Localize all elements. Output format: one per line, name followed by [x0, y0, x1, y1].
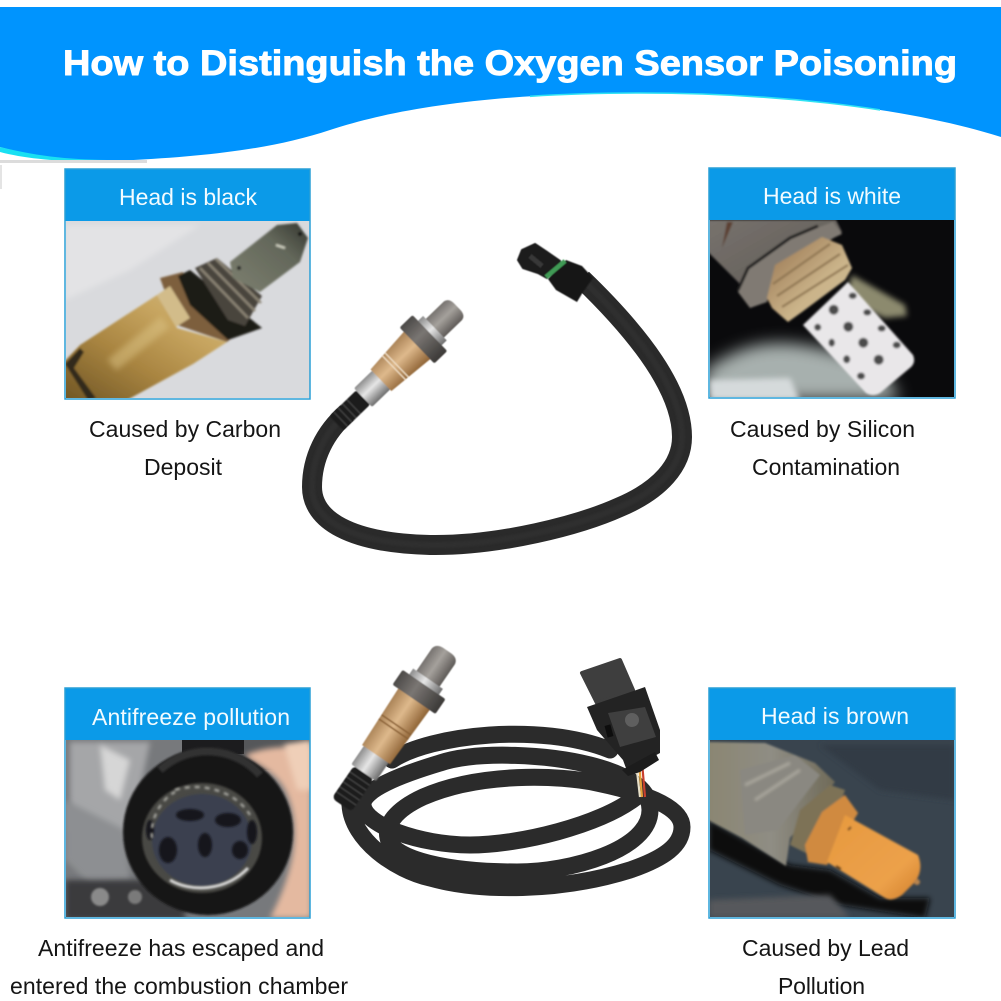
panel border: head is white	[709, 168, 955, 398]
wires	[636, 762, 645, 797]
photo: antifreeze contaminated part	[65, 740, 311, 920]
header bar: antifreeze pollution	[65, 688, 310, 740]
header wave banner	[0, 7, 1001, 189]
header label: head is black: Head is black	[119, 184, 258, 210]
panel: head is black	[60, 169, 311, 400]
panel border: antifreeze pollution	[65, 688, 310, 918]
title: How to Distinguish the Oxygen Sensor Poisoning	[63, 44, 957, 83]
panel border: head is black	[65, 169, 310, 399]
photo: carbon-fouled sensor	[60, 221, 311, 400]
caption: lead pollution: Pollution	[778, 973, 865, 999]
rectangular connector	[582, 660, 660, 776]
caption: carbon deposit: Deposit	[144, 454, 223, 480]
header bar: head is black	[65, 169, 310, 221]
panel: head is white	[705, 168, 955, 400]
panel: antifreeze pollution	[65, 688, 311, 920]
caption: silicon contamination	[730, 416, 915, 480]
header label: head is white: Head is white	[763, 183, 901, 209]
header label: head is brown: Head is brown	[761, 703, 909, 729]
photo: silicon contaminated sensor	[705, 220, 955, 400]
panel: head is brown	[708, 688, 955, 918]
caption: silicon contamination: Caused by Silicon	[730, 416, 915, 442]
coiled cable	[350, 734, 682, 888]
round connector	[518, 244, 593, 302]
header label: antifreeze pollution: Antifreeze pollution	[92, 704, 290, 730]
photo: lead polluted sensor	[708, 740, 955, 918]
panel border: head is brown	[709, 688, 955, 918]
caption: lead pollution: Caused by Lead	[742, 935, 909, 961]
header bar: head is white	[709, 168, 955, 220]
header bar: head is brown	[709, 688, 955, 740]
sensor body	[319, 289, 475, 441]
caption: antifreeze	[10, 935, 348, 999]
product photo: sensor with coiled cable	[320, 636, 682, 888]
product photo: sensor with round connector	[312, 244, 682, 545]
caption: carbon deposit: Caused by Carbon	[89, 416, 281, 442]
caption: lead pollution	[742, 935, 909, 999]
cable	[312, 279, 682, 545]
caption: carbon deposit	[89, 416, 281, 480]
caption: antifreeze: entered the combustion chamber	[10, 973, 348, 999]
caption: silicon contamination: Contamination	[752, 454, 900, 480]
caption: antifreeze: Antifreeze has escaped and	[38, 935, 324, 961]
sensor body	[320, 636, 469, 820]
